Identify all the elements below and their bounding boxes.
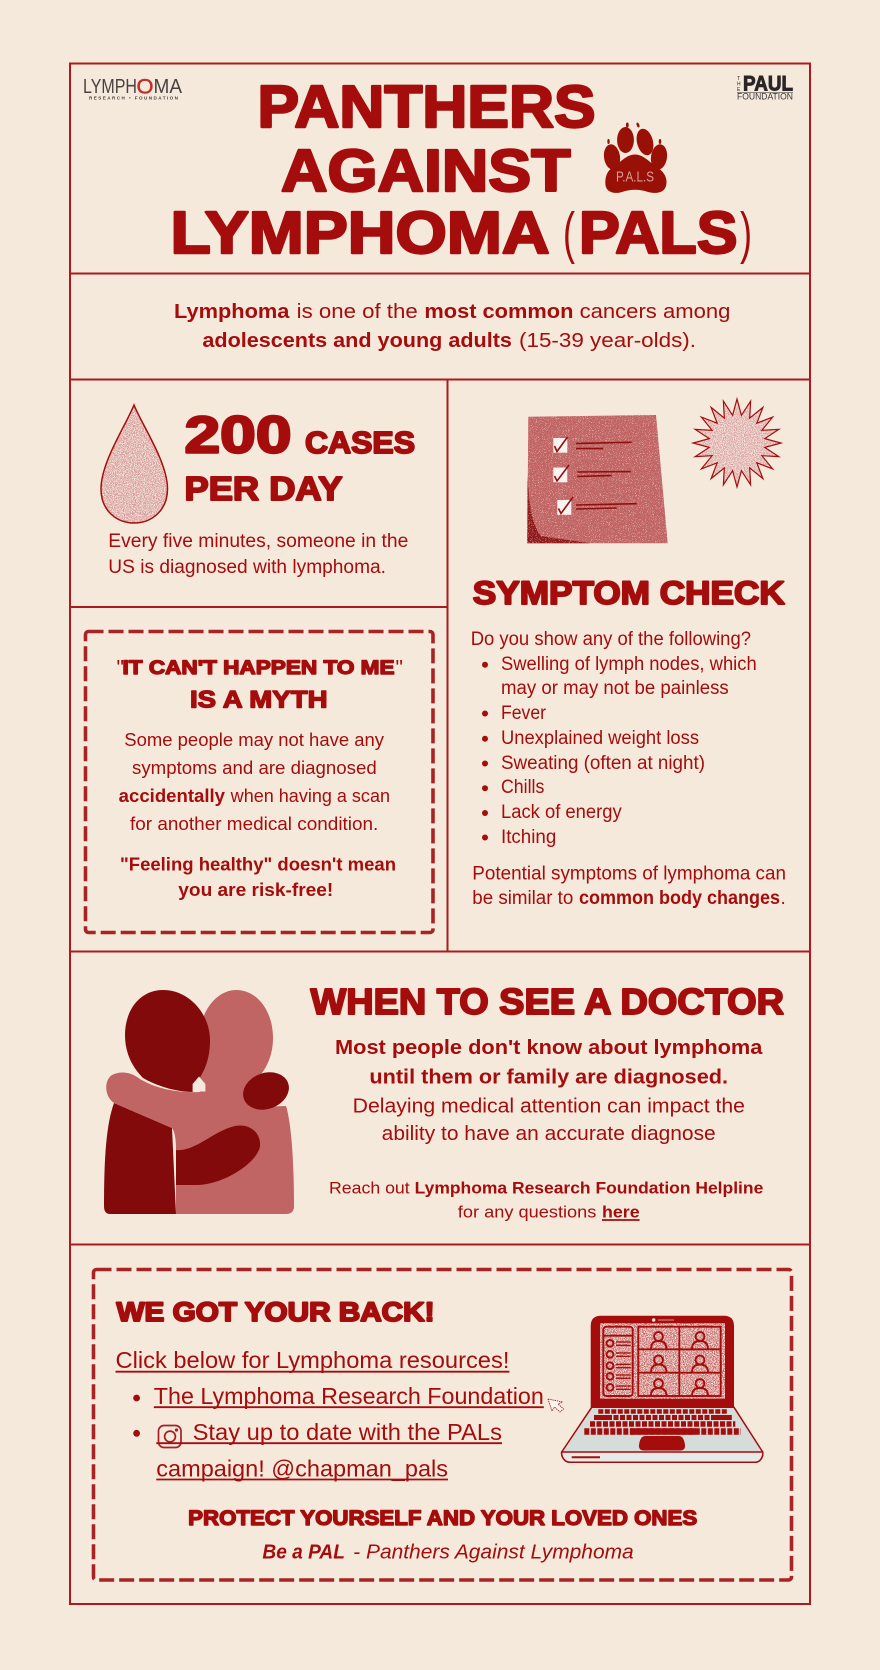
title: PALS (579, 199, 738, 266)
panel: myth (70, 607, 448, 952)
symptom note: Potential symptoms of lymphoma can (472, 863, 786, 884)
closing tagline: Be a PAL (262, 1541, 345, 1563)
title (170, 73, 752, 266)
myth text: when having a scan (230, 786, 390, 806)
title: ) (740, 201, 752, 265)
doctor text: Delaying medical attention can impact the (353, 1095, 745, 1117)
stat description: US is diagnosed with lymphoma. (108, 557, 386, 578)
panel: intro statement (70, 274, 810, 380)
doctor text: ability to have an accurate diagnose (382, 1123, 716, 1145)
symptom list: may or may not be painless (501, 678, 729, 699)
icon: two people hugging (104, 990, 294, 1214)
symptom list: Itching (501, 827, 556, 848)
icon: PALS paw print (602, 122, 669, 193)
myth heading: " (116, 656, 124, 680)
symptom note: common body changes (579, 888, 780, 909)
resources intro link: Click below for Lymphoma resources! (116, 1347, 509, 1373)
link list (133, 1383, 544, 1481)
symptom list: Chills (501, 777, 544, 798)
title: AGAINST (281, 137, 570, 204)
icon: instagram (158, 1426, 181, 1448)
icon: checklist note (527, 415, 668, 543)
helpline text (329, 1178, 763, 1222)
icon: blood drop (101, 405, 168, 523)
doctor bold statement (335, 1036, 763, 1088)
doctor bold statement: Most people don't know about lymphoma (335, 1036, 763, 1059)
intro text: adolescents and young adults (202, 330, 512, 352)
symptom list: Sweating (often at night) (501, 753, 705, 774)
doctor heading: WHEN TO SEE A DOCTOR (310, 981, 784, 1022)
symptom question: Do you show any of the following? (471, 629, 751, 650)
intro text: Lymphoma (174, 301, 290, 323)
symptom list: Swelling of lymph nodes, which (501, 654, 757, 675)
logo: The Paul Foundation: H (737, 82, 741, 88)
title: ( (563, 201, 575, 265)
logo: Lymphoma Research Foundation (83, 74, 182, 100)
stat: 200 cases per day (184, 407, 415, 508)
myth heading: IT CAN'T HAPPEN TO ME (122, 657, 394, 679)
stat: 200 cases per day: CASES (305, 425, 415, 460)
logo: Lymphoma Research Foundation: RESEARCH • FOUNDATION (89, 96, 179, 100)
symptom heading: SYMPTOM CHECK (473, 575, 785, 611)
stat: 200 cases per day: 200 (184, 407, 292, 465)
panel: header (70, 64, 810, 274)
intro text: (15-39 year-olds). (519, 330, 696, 352)
symptom note: . (780, 888, 786, 909)
icon: starburst (693, 399, 781, 487)
symptom list: Fever (501, 703, 547, 724)
intro text: is one of the (297, 301, 418, 323)
doctor text (353, 1095, 745, 1145)
logo: The Paul Foundation: PAUL (743, 72, 793, 96)
myth text: symptoms and are diagnosed (132, 758, 377, 778)
intro text: cancers among (580, 301, 730, 323)
helpline text: here (602, 1203, 640, 1222)
myth text (119, 730, 390, 834)
doctor bold statement: until them or family are diagnosed. (369, 1065, 728, 1088)
myth text: Some people may not have any (124, 730, 384, 750)
icon: PALS paw print: P.A.L.S (616, 170, 654, 186)
logo: Lymphoma Research Foundation: O (136, 74, 154, 98)
intro text: most common (424, 301, 573, 323)
myth heading: " (396, 656, 403, 680)
title: LYMPHOMA (170, 199, 550, 266)
panel: symptom check (448, 380, 810, 952)
myth heading: IS A MYTH (190, 686, 328, 713)
logo: The Paul Foundation: FOUNDATION (737, 92, 793, 102)
icon: laptop video call (562, 1316, 763, 1462)
myth takeaway (120, 855, 396, 900)
closing tagline: - Panthers Against Lymphoma (353, 1541, 634, 1563)
stat description: Every five minutes, someone in the (108, 531, 408, 552)
resources heading: WE GOT YOUR BACK! (116, 1297, 434, 1327)
myth takeaway: you are risk-free! (178, 880, 333, 900)
symptom note (472, 863, 786, 909)
stat description (108, 531, 408, 578)
link list: The Lymphoma Research Foundation (154, 1383, 544, 1409)
panel: when to see a doctor (70, 952, 810, 1244)
helpline text: for any questions (458, 1203, 596, 1222)
helpline text: Lymphoma Research Foundation Helpline (415, 1178, 763, 1197)
link list: campaign! @chapman_pals (156, 1455, 448, 1481)
dashed frame (86, 632, 433, 932)
helpline text: Reach out (329, 1178, 410, 1197)
intro text (174, 301, 730, 352)
dashed frame (94, 1270, 792, 1580)
logo: Lymphoma Research Foundation: MA (154, 75, 182, 98)
link list: Stay up to date with the PALs (193, 1419, 502, 1445)
panel: resources (70, 1244, 810, 1604)
logo: The Paul Foundation (737, 72, 793, 102)
myth text: accidentally (119, 786, 225, 806)
logo: The Paul Foundation: E (737, 87, 741, 93)
logo: Lymphoma Research Foundation: LYMPH (83, 75, 137, 98)
symptom list: Lack of energy (501, 802, 622, 823)
panel: cases per day (70, 380, 448, 607)
symptom note: be similar to (472, 888, 573, 909)
myth takeaway: "Feeling healthy" doesn't mean (120, 855, 396, 875)
closing headline: PROTECT YOURSELF AND YOUR LOVED ONES (188, 1507, 697, 1530)
icon: mouse cursor (548, 1399, 564, 1412)
myth text: for another medical condition. (130, 814, 378, 834)
myth heading (116, 656, 403, 713)
title: PANTHERS (258, 73, 596, 140)
symptom list (482, 654, 757, 848)
logo: The Paul Foundation: T (737, 76, 740, 82)
symptom list: Unexplained weight loss (501, 728, 699, 749)
stat: 200 cases per day: PER DAY (184, 471, 342, 508)
